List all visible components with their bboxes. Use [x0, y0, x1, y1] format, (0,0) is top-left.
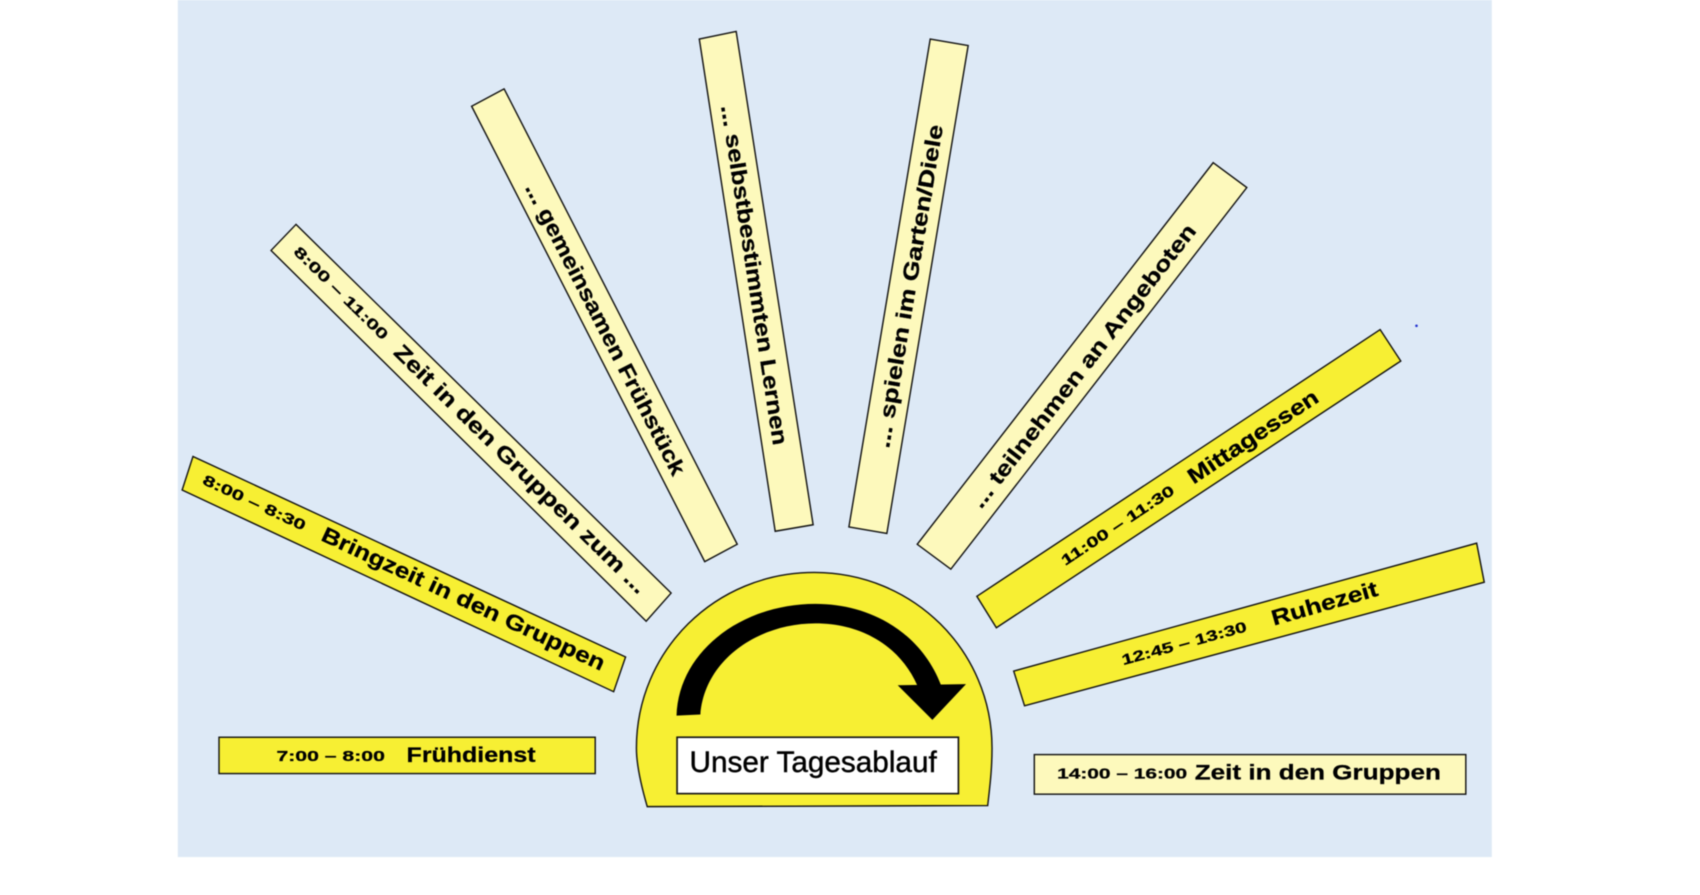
ray: Frühdienst: Frühdienst: [407, 742, 536, 767]
ray: Zeit in den Gruppen zum: Zeit in den Gruppen zum ...: [389, 339, 652, 599]
ray: spielen im Garten/Diele: ... spielen im Garten/Diele: [869, 123, 948, 450]
ray: Zeit in den Gruppen nachmittags: [1034, 755, 1466, 794]
title box: Unser Tagesablauf: [677, 737, 958, 794]
icon: clockwise arrow: [677, 604, 966, 720]
ray: Zeit in den Gruppen nachmittags: Zeit in den Gruppen: [1195, 760, 1441, 785]
ray: Zeit in den Gruppen zum: 8:00 – 11:00: [290, 244, 391, 344]
ray: Zeit in den Gruppen nachmittags: 14:00 – 16:00: [1057, 766, 1187, 782]
ray: Mittagessen: [977, 330, 1401, 628]
ray: Ruhezeit: 12:45 – 13:30: [1120, 620, 1249, 669]
ray: Ruhezeit: Ruhezeit: [1268, 576, 1381, 630]
sun semicircle: [636, 572, 992, 807]
ray: Bringzeit: [182, 456, 626, 692]
ray: Mittagessen: Mittagessen: [1183, 384, 1323, 489]
ray: Frühdienst: 7:00 – 8:00: [276, 749, 385, 765]
ray: spielen im Garten/Diele: [849, 39, 968, 533]
ray: Mittagessen: 11:00 – 11:30: [1059, 483, 1178, 569]
ray: selbstbestimmten Lernen: ... selbstbestimmten Lernen: [716, 103, 793, 447]
ray: selbstbestimmten Lernen: [699, 31, 813, 531]
ray: Bringzeit: Bringzeit in den Gruppen: [318, 522, 609, 676]
title box: Unser Tagesablauf: Unser Tagesablauf: [690, 747, 938, 779]
blue dot: [1415, 324, 1418, 327]
ray: gemeinsamen Frühstück: ... gemeinsamen Frühstück: [520, 178, 691, 480]
ray: teilnehmen an Angeboten: [917, 163, 1247, 569]
ray: Zeit in den Gruppen zum: [271, 224, 671, 621]
background panel: [178, 0, 1492, 857]
ray: Frühdienst: [219, 737, 595, 774]
ray: Bringzeit: 8:00 – 8:30: [200, 473, 308, 534]
ray: Ruhezeit: [1014, 543, 1484, 706]
ray: gemeinsamen Frühstück: [472, 89, 737, 562]
ray: teilnehmen an Angeboten: ... teilnehmen an Angeboten: [965, 219, 1201, 513]
